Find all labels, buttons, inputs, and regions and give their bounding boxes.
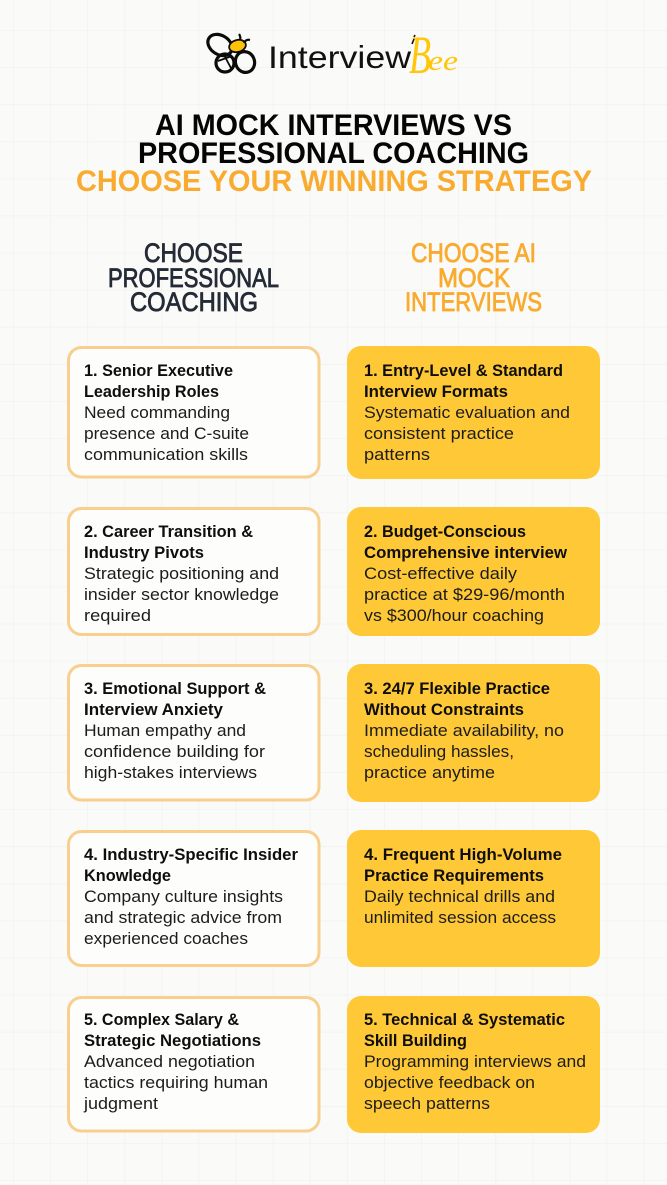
card 4 heading xyxy=(84,846,299,885)
AI card 2 description: vs $300/hour coaching xyxy=(364,607,544,625)
AI card 1 heading: 1. Entry-Level & Standard xyxy=(364,362,563,380)
card 1 description xyxy=(84,404,249,464)
AI card 2 heading: 2. Budget-Conscious xyxy=(364,523,526,541)
card 1 description: communication skills xyxy=(84,446,248,464)
AI card 4 description: Daily technical drills and xyxy=(364,888,555,906)
card 3 heading xyxy=(84,680,266,719)
card 5 description: tactics requiring human xyxy=(84,1074,268,1092)
AI card 2 heading: Comprehensive interview xyxy=(364,544,567,562)
AI card 3 description: practice anytime xyxy=(364,764,495,782)
AI card 1 heading: Interview Formats xyxy=(364,383,508,401)
wordmark: Bee xyxy=(409,25,458,85)
card 1 heading xyxy=(84,362,233,401)
card 5 description xyxy=(83,1053,268,1113)
card 3 heading: Interview Anxiety xyxy=(84,701,224,719)
AI card 3 heading: Without Constraints xyxy=(364,701,524,719)
panel: AI card 1 xyxy=(347,346,600,479)
heading: choose professional coaching: CHOOSE xyxy=(144,238,243,268)
card 3 description: high-stakes interviews xyxy=(84,764,257,782)
card 2 description: Strategic positioning and xyxy=(84,565,279,583)
AI card 3 heading xyxy=(364,680,550,719)
AI card 3 description: Immediate availability, no xyxy=(364,722,564,740)
card 2 description xyxy=(84,565,279,625)
card 1 heading: 1. Senior Executive xyxy=(84,362,233,380)
card 3 description: Human empathy and xyxy=(84,722,246,740)
AI card 3 description xyxy=(364,722,564,782)
card 5 heading: Strategic Negotiations xyxy=(84,1032,261,1050)
card 2 description: required xyxy=(84,607,151,625)
AI card 1 description: Systematic evaluation and xyxy=(364,404,570,422)
card 2 heading xyxy=(84,523,253,562)
panel: AI card 3 xyxy=(347,664,600,802)
title xyxy=(76,109,592,198)
logo: InterviewBee xyxy=(204,25,458,85)
heading: choose professional coaching: COACHING xyxy=(130,287,258,317)
card 1 description: presence and C-suite xyxy=(84,425,249,443)
AI card 5 description: objective feedback on xyxy=(364,1074,535,1092)
card 3 heading: 3. Emotional Support & xyxy=(84,680,266,698)
AI card 2 description xyxy=(364,565,565,625)
AI card 3 heading: 3. 24/7 Flexible Practice xyxy=(364,680,550,698)
card 5 description: Advanced negotiation xyxy=(84,1053,255,1071)
card 4 heading: Knowledge xyxy=(84,867,171,885)
heading: choose AI mock interviews: MOCK xyxy=(438,263,510,293)
card 2 heading: 2. Career Transition & xyxy=(84,523,253,541)
card 2 description: insider sector knowledge xyxy=(84,586,279,604)
AI card 4 description: unlimited session access xyxy=(364,909,556,927)
card 3 description xyxy=(84,722,266,782)
AI card 1 description xyxy=(364,404,570,464)
card 4 description: experienced coaches xyxy=(84,930,248,948)
card 1 description: Need commanding xyxy=(84,404,230,422)
AI card 1 description: patterns xyxy=(364,446,430,464)
card 2 heading: Industry Pivots xyxy=(84,544,204,562)
heading: choose professional coaching: PROFESSIONAL xyxy=(108,263,279,293)
panel: AI card 5 xyxy=(347,996,600,1133)
title: PROFESSIONAL COACHING xyxy=(138,137,529,170)
card 3 description: confidence building for xyxy=(84,743,266,761)
AI card 5 heading: 5. Technical & Systematic xyxy=(364,1011,565,1029)
AI card 4 heading xyxy=(364,846,562,885)
AI card 5 description xyxy=(364,1053,586,1113)
AI card 4 heading: 4. Frequent High-Volume xyxy=(364,846,562,864)
wordmark: Bee: B xyxy=(409,25,431,85)
card 5 description: judgment xyxy=(83,1095,158,1113)
panel: coaching card 3 xyxy=(68,666,319,800)
title: AI MOCK INTERVIEWS VS xyxy=(155,109,512,142)
title: CHOOSE YOUR WINNING STRATEGY xyxy=(76,165,592,198)
panel: coaching card 5 xyxy=(68,998,319,1131)
AI card 5 description: speech patterns xyxy=(364,1095,490,1113)
AI card 5 heading: Skill Building xyxy=(364,1032,467,1050)
card 1 heading: Leadership Roles xyxy=(84,383,219,401)
AI card 1 heading xyxy=(364,362,563,401)
panel: AI card 4 xyxy=(347,830,600,967)
heading: choose AI mock interviews: CHOOSE AI xyxy=(411,238,536,268)
card 4 description: Company culture insights xyxy=(84,888,283,906)
AI card 1 description: consistent practice xyxy=(364,425,514,443)
AI card 2 description: Cost-effective daily xyxy=(364,565,518,583)
AI card 2 heading xyxy=(364,523,567,562)
wordmark: Bee: ee xyxy=(428,45,458,77)
panel: coaching card 1 xyxy=(68,348,319,477)
panel: coaching card 2 xyxy=(68,508,319,634)
panel: coaching card 4 xyxy=(68,832,319,966)
heading: choose AI mock interviews xyxy=(405,238,542,317)
AI card 5 description: Programming interviews and xyxy=(364,1053,586,1071)
AI card 3 description: scheduling hassles, xyxy=(364,743,514,761)
AI card 2 description: practice at $29-96/month xyxy=(364,586,565,604)
heading: choose AI mock interviews: INTERVIEWS xyxy=(405,287,542,317)
AI card 4 description xyxy=(364,888,556,927)
card 5 heading: 5. Complex Salary & xyxy=(84,1011,239,1029)
AI card 4 heading: Practice Requirements xyxy=(364,867,544,885)
panel: AI card 2 xyxy=(347,507,600,636)
heading: choose professional coaching xyxy=(108,238,279,317)
wordmark: Interview: Interview xyxy=(268,39,411,75)
card 4 heading: 4. Industry-Specific Insider xyxy=(84,846,299,864)
icon: bee xyxy=(204,30,258,75)
AI card 5 heading xyxy=(364,1011,565,1050)
card 4 description: and strategic advice from xyxy=(84,909,282,927)
card 4 description xyxy=(84,888,283,948)
card 5 heading xyxy=(84,1011,261,1050)
